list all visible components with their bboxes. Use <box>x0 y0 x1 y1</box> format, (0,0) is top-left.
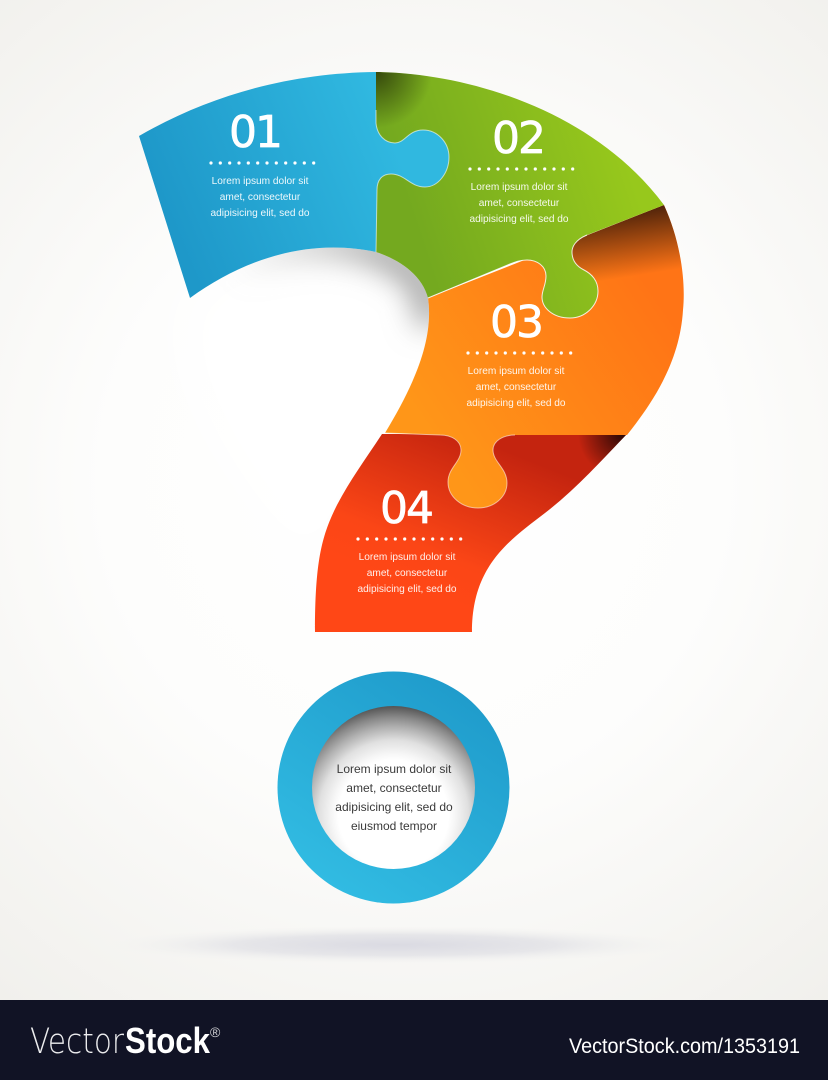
label 02: amet, consectetur <box>479 198 560 209</box>
label 04: amet, consectetur <box>367 568 448 579</box>
footer logo: Vector <box>30 1022 125 1062</box>
label 01 <box>209 107 315 219</box>
hole of the question mark <box>260 248 429 341</box>
puzzle piece 01: blue <box>139 72 449 298</box>
footer image id: VectorStock.com/1353191 <box>569 1035 800 1058</box>
puzzle piece 04: red <box>315 434 627 632</box>
label 01: 01 <box>229 107 281 158</box>
label 02: adipisicing elit, sed do <box>469 214 569 225</box>
footer logo: ® <box>210 1024 221 1040</box>
label 03: 03 <box>490 297 542 348</box>
circle dot of the question mark <box>278 672 510 904</box>
label 01: Lorem ipsum dolor sit <box>212 176 309 187</box>
label 02 <box>468 113 574 225</box>
label 03: Lorem ipsum dolor sit <box>468 366 565 377</box>
label 02: Lorem ipsum dolor sit <box>471 182 568 193</box>
circle dot of the question mark: adipisicing elit, sed do <box>335 800 453 814</box>
label 04: adipisicing elit, sed do <box>357 584 457 595</box>
label 01: amet, consectetur <box>220 192 301 203</box>
footer logo: Stock <box>125 1020 211 1061</box>
puzzle piece 02: green <box>376 72 664 318</box>
label 01: adipisicing elit, sed do <box>210 208 310 219</box>
label 02: 02 <box>492 113 544 164</box>
circle dot of the question mark: amet, consectetur <box>346 781 442 795</box>
footer bar <box>0 1000 828 1080</box>
label 04: Lorem ipsum dolor sit <box>359 552 456 563</box>
circle dot of the question mark: eiusmod tempor <box>351 819 437 833</box>
label 03 <box>466 297 572 409</box>
label 03: adipisicing elit, sed do <box>466 398 566 409</box>
label 03: amet, consectetur <box>476 382 557 393</box>
footer logo <box>30 1020 221 1062</box>
label 04 <box>356 483 462 595</box>
puzzle piece 03: orange <box>385 205 684 508</box>
circle dot of the question mark: Lorem ipsum dolor sit <box>337 762 452 776</box>
ground shadow <box>103 926 687 964</box>
label 04: 04 <box>380 483 432 534</box>
